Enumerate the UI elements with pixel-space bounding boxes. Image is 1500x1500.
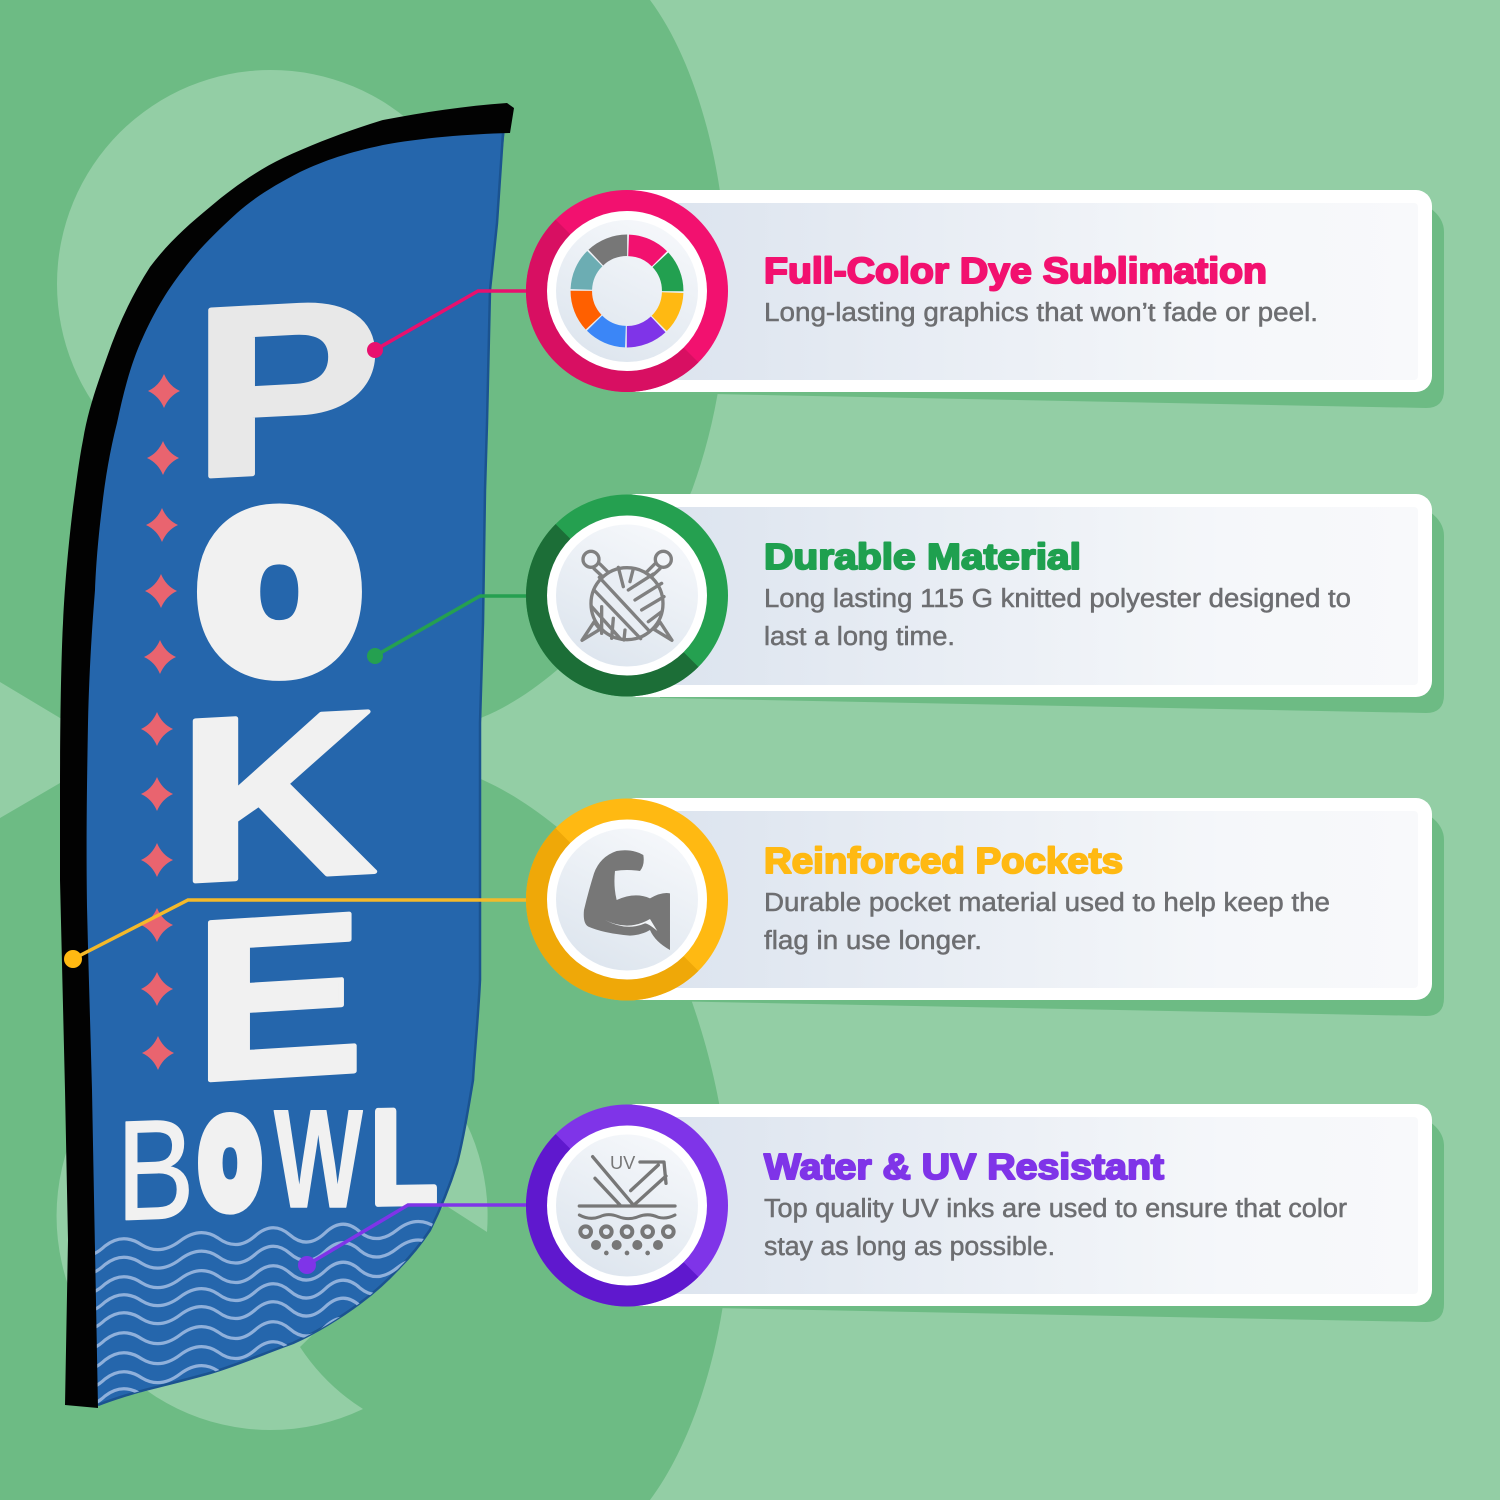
flag word: POKE: O [208, 483, 351, 702]
icon: UV reflecting off fabric [579, 1152, 675, 1255]
heading: Water & UV Resistant [764, 1146, 1164, 1187]
icon: flexed muscle arm [584, 850, 670, 950]
card shadow [660, 1122, 1444, 1322]
callout line: reinforced pockets [64, 900, 530, 968]
card [620, 190, 1432, 392]
panel: Reinforced Pockets [620, 798, 1444, 1016]
heading: Reinforced Pockets [764, 840, 1123, 881]
icon: color wheel [562, 226, 692, 356]
badge: color wheel [526, 190, 728, 392]
panel: Reinforced Pockets: flag in use longer. [764, 927, 982, 955]
description: Long lasting 115 G knitted polyester designed to [764, 585, 1351, 613]
feather flag [60, 103, 514, 1408]
card shadow [660, 816, 1444, 1016]
flag word: BOWL: W [274, 1081, 363, 1238]
panel: Water & UV Resistant [620, 1104, 1444, 1322]
flag word: BOWL [116, 1081, 438, 1251]
badge: knitted yarn [526, 494, 728, 696]
flag stars [141, 374, 180, 1070]
card [620, 798, 1432, 1000]
flag word: POKE: P [192, 250, 382, 529]
flag word: POKE: K [177, 661, 377, 932]
background shape: upper light circle [57, 70, 485, 498]
background shape: lower dark green circle [0, 750, 730, 1500]
flag word: POKE: E [193, 863, 364, 1130]
panel: Durable Material [620, 494, 1444, 713]
icon: UV reflecting off fabric: UV [610, 1152, 636, 1173]
badge: reinforced arm [526, 798, 728, 1000]
flag word: BOWL: B [116, 1089, 194, 1251]
callout line: dye sublimation [367, 291, 530, 358]
description: Durable pocket material used to help keep the [764, 889, 1330, 917]
card inner [640, 507, 1418, 685]
panel: Water & UV Resistant: stay as long as possible. [764, 1233, 1055, 1261]
flag word: BOWL: O [202, 1101, 258, 1228]
callout line: water and UV [298, 1205, 530, 1274]
card inner [640, 1117, 1418, 1294]
card shadow [660, 512, 1444, 713]
black pole sleeve [60, 103, 514, 1408]
background shape: lower light circle [57, 1002, 488, 1430]
flag fabric [72, 125, 505, 1405]
flag edge seam [98, 133, 503, 1405]
badge: water and UV [526, 1104, 728, 1306]
card [620, 494, 1432, 697]
heading: Durable Material [764, 536, 1081, 577]
card shadow [660, 208, 1444, 408]
flag word: POKE [177, 250, 382, 1130]
flag word: BOWL: L [370, 1081, 438, 1232]
card [620, 1104, 1432, 1306]
card inner [640, 203, 1418, 380]
callout line: durable material [367, 596, 530, 664]
description: Top quality UV inks are used to ensure that color [764, 1195, 1348, 1223]
panel: Full-Color Dye Sublimation [620, 190, 1444, 408]
icon: yarn ball with needles [582, 551, 672, 640]
wave pattern [68, 1221, 437, 1406]
heading: Full-Color Dye Sublimation [764, 250, 1267, 291]
panel: Durable Material: last a long time. [764, 623, 955, 651]
card inner [640, 811, 1418, 988]
background shape: upper dark green circle [0, 0, 727, 749]
description: Long-lasting graphics that won’t fade or peel. [764, 299, 1318, 327]
